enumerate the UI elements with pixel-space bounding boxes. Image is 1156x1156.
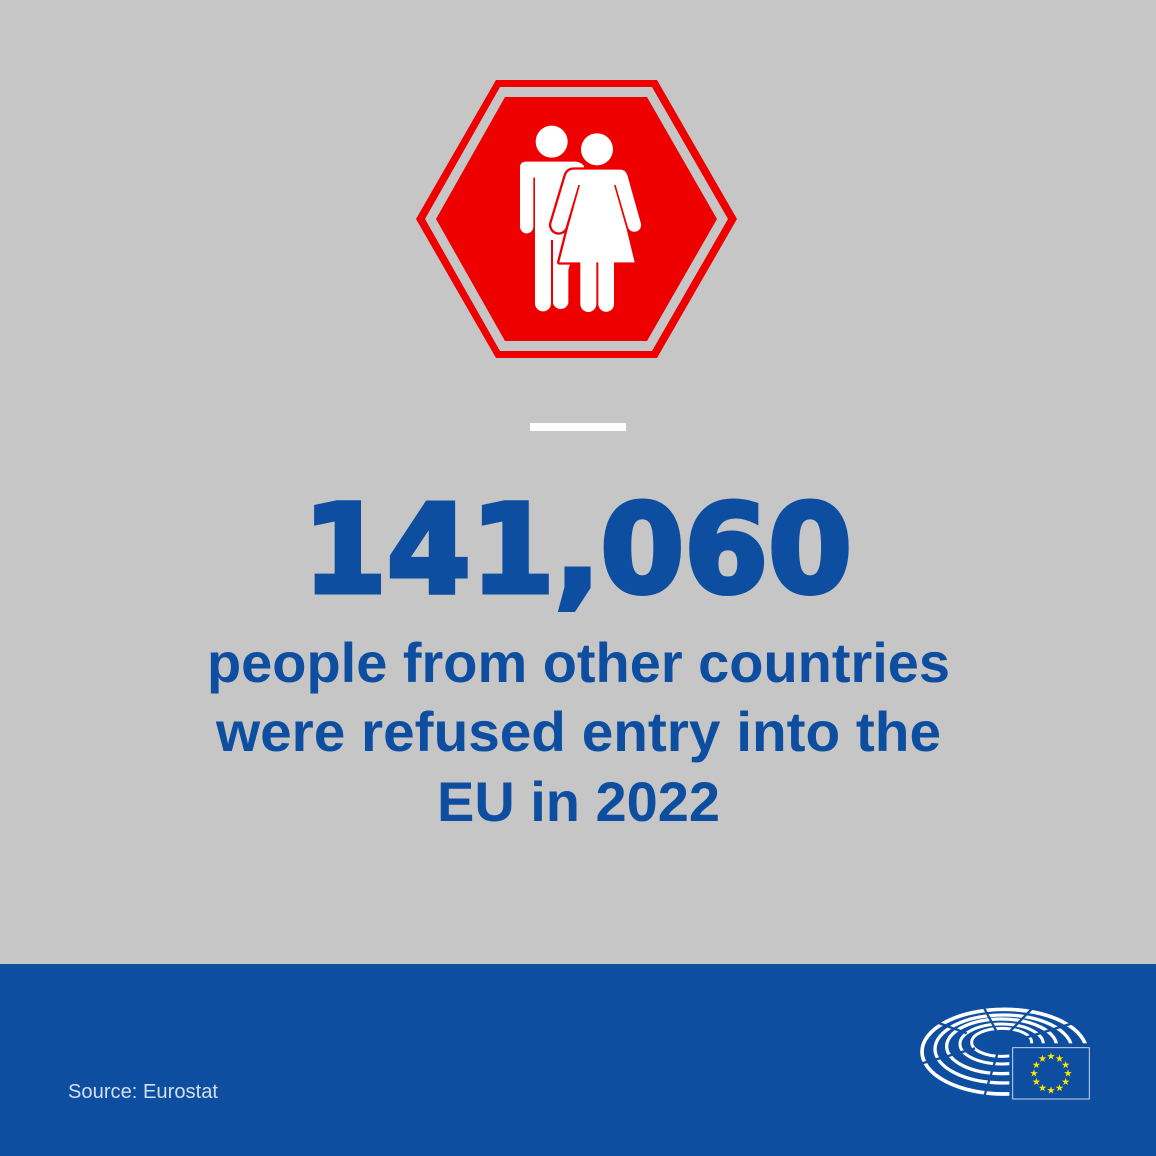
- icon: couple figures: [520, 126, 641, 312]
- line 2: were refused entry into the: [215, 700, 941, 763]
- line 3: EU in 2022: [437, 770, 720, 833]
- hexagon outer ring: [416, 80, 737, 358]
- hexagon inner fill: [436, 97, 717, 341]
- woman figure: [551, 133, 641, 312]
- hemicycle gaps: [918, 1002, 1096, 1103]
- body text: [207, 631, 950, 833]
- footer band: [0, 964, 1156, 1156]
- flag stars: [1030, 1052, 1072, 1094]
- EU flag: [1013, 1048, 1089, 1099]
- man figure: [520, 126, 587, 311]
- woman outline: [551, 170, 641, 262]
- icon: red stop hexagon with couple: [416, 80, 737, 358]
- source text: Source: Eurostat: [68, 1081, 218, 1103]
- headline number: 141,060: [303, 479, 852, 621]
- line 1: people from other countries: [207, 631, 950, 694]
- hemicycle rings: [922, 1009, 1087, 1094]
- white divider bar: [530, 423, 626, 431]
- logo: European Parliament: [918, 1002, 1096, 1103]
